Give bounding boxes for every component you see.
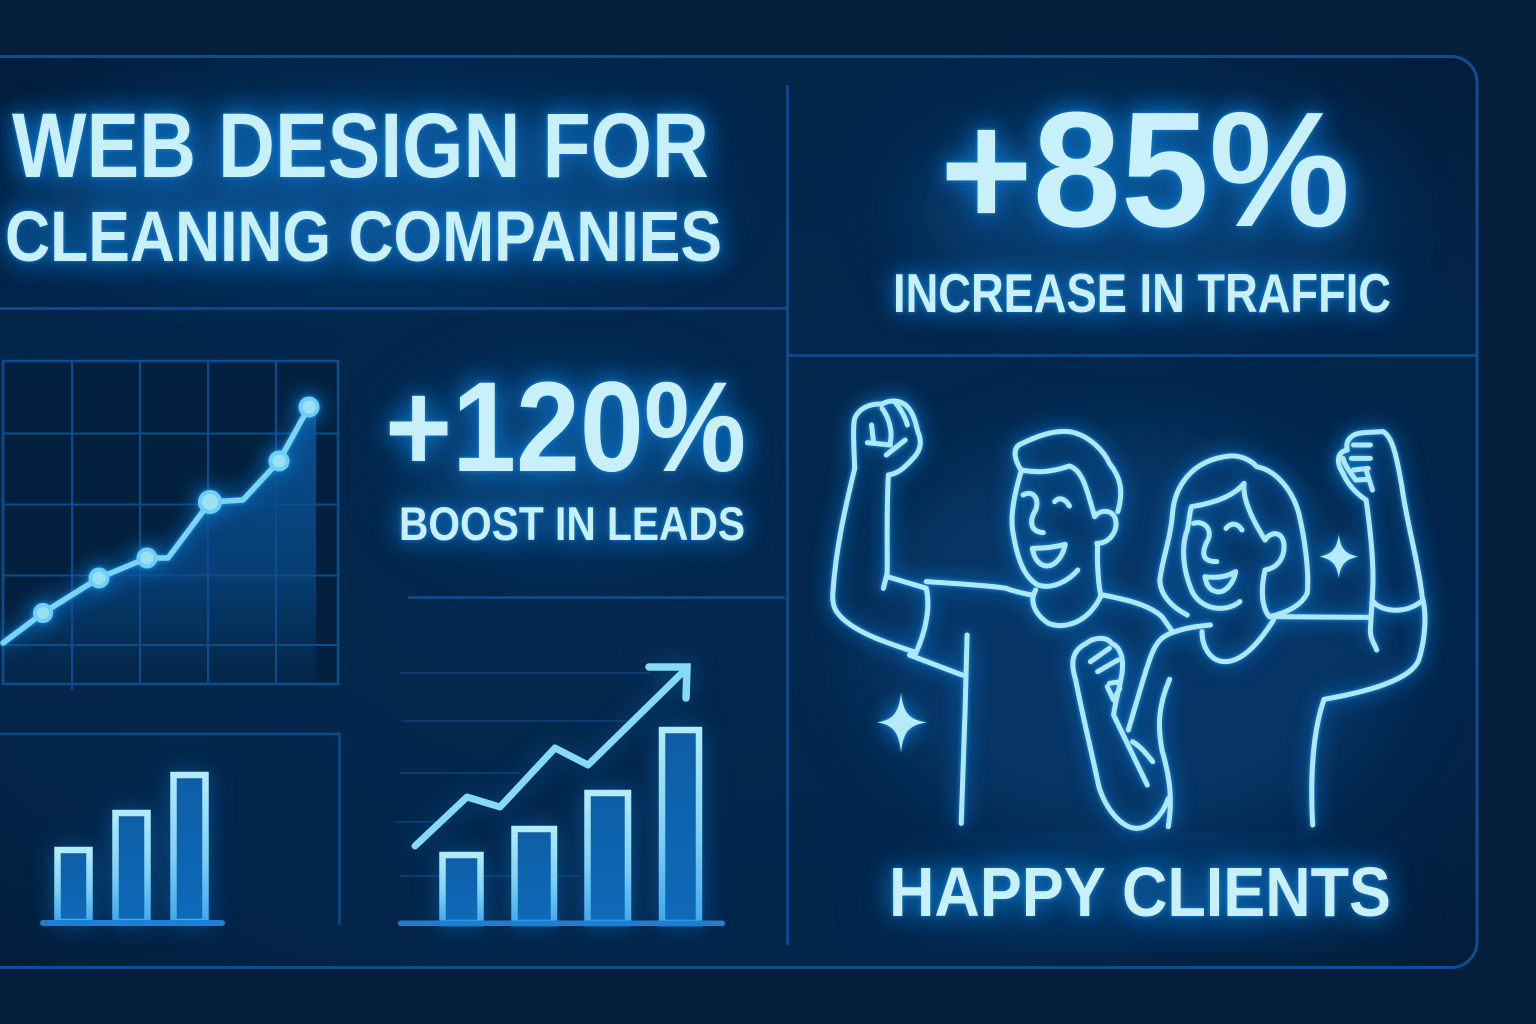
- stat: +120% boost in leads: +120%: [385, 356, 746, 499]
- panel fill: [3, 361, 338, 684]
- label: happy clients: HAPPY CLIENTS: [889, 853, 1391, 931]
- chart grid: [3, 361, 338, 690]
- bars: [442, 730, 699, 923]
- baseline: [398, 920, 725, 926]
- woman: [1073, 432, 1425, 828]
- stat: +85% increase in traffic: [893, 78, 1391, 324]
- stat: +120% boost in leads: BOOST IN LEADS: [399, 497, 745, 550]
- title: CLEANING COMPANIES: [5, 198, 722, 277]
- illustration: happy clients: [833, 401, 1425, 828]
- area under line: [3, 407, 316, 684]
- title: WEB DESIGN FOR: [12, 95, 709, 197]
- stat: +85% increase in traffic: +85%: [940, 78, 1350, 261]
- title: [5, 95, 722, 277]
- panel outline: [0, 734, 340, 925]
- faint guide lines: [395, 673, 650, 876]
- trend arrow: [415, 667, 687, 846]
- growth line with markers: [3, 398, 318, 643]
- bars: [58, 775, 206, 922]
- baseline: [40, 920, 225, 926]
- sparkles: [877, 534, 1358, 753]
- line chart panel: [3, 361, 338, 690]
- small bar chart panel: [0, 734, 340, 926]
- man: [833, 401, 1173, 823]
- growth bar chart with arrow: [395, 667, 725, 926]
- stat: +85% increase in traffic: INCREASE IN TRAFFIC: [893, 262, 1391, 324]
- stat: +120% boost in leads: [385, 356, 746, 550]
